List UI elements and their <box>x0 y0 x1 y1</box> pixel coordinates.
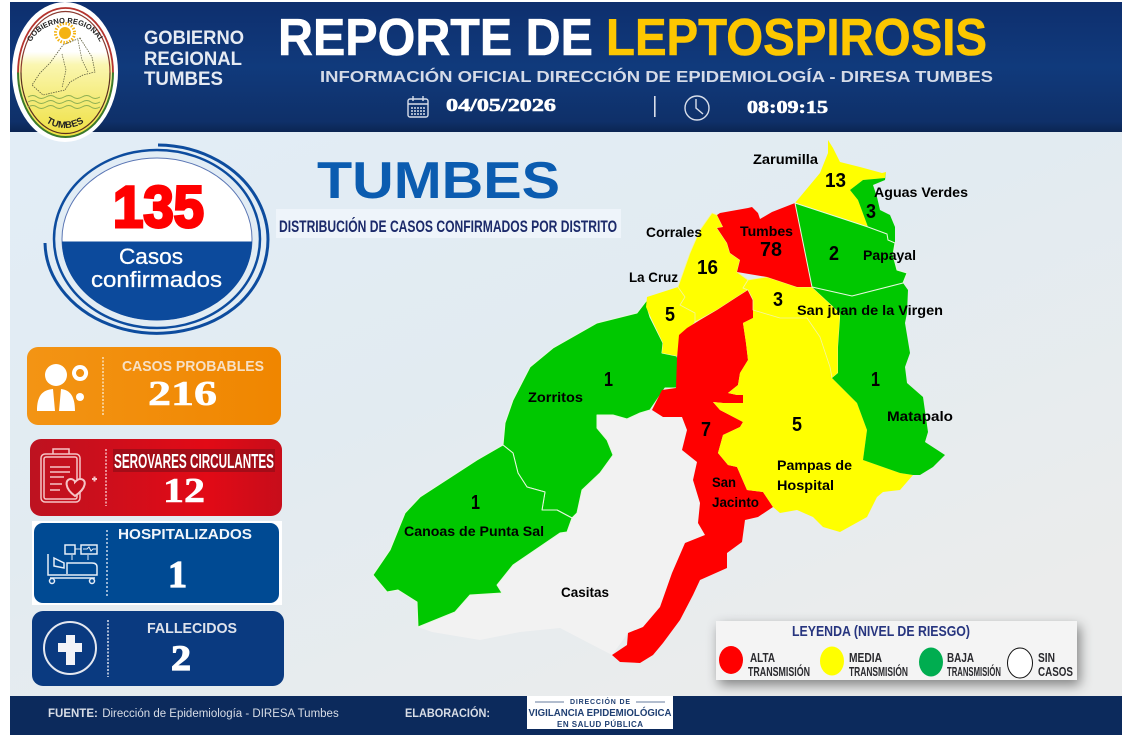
government name: REGIONAL <box>144 49 242 70</box>
district: Zarumilla <box>795 140 886 227</box>
district labels and counts: Canoas de Punta Sal <box>404 523 544 539</box>
icon: regional government emblem <box>12 2 118 142</box>
icon: cross <box>44 622 96 674</box>
time: 08:09:15 <box>747 97 828 117</box>
district labels and counts: Zorritos <box>528 389 583 405</box>
district: Tumbes <box>717 203 812 287</box>
district: Aguas Verdes <box>850 172 895 243</box>
district labels and counts: 13 <box>825 170 846 192</box>
card: hospitalizados: HOSPITALIZADOS <box>118 526 252 543</box>
legend item: sin casos: CASOS <box>1038 664 1073 679</box>
district labels and counts: La Cruz <box>629 269 678 285</box>
district labels and counts <box>404 151 968 600</box>
source: FUENTE: <box>48 708 98 720</box>
district: Canoas de Punta Sal <box>373 445 572 627</box>
legend item: media: MEDIA <box>849 650 882 665</box>
legend: LEYENDA (NIVEL DE RIESGO) <box>792 623 970 640</box>
legend item: baja: BAJA <box>947 650 974 665</box>
epidemiology office logo <box>527 696 673 729</box>
district labels and counts: Aguas Verdes <box>874 184 968 200</box>
report title <box>278 9 987 67</box>
map heading <box>276 152 621 238</box>
legend item: media: TRANSMISIÓN <box>849 664 908 679</box>
district labels and counts: Jacinto <box>712 494 759 510</box>
district labels and counts: Tumbes <box>740 223 793 239</box>
district labels and counts: Pampas de <box>777 457 852 473</box>
date: 04/05/2026 <box>446 95 556 115</box>
district labels and counts: Casitas <box>561 584 609 600</box>
confirmed cases label: Casos <box>119 244 183 269</box>
card: serovares circulantes <box>30 439 282 516</box>
legend <box>716 621 1077 680</box>
legend item: sin casos <box>1008 648 1073 679</box>
epidemiology office logo: EN SALUD PÚBLICA <box>557 720 643 729</box>
produced by: ELABORACIÓN: <box>405 707 490 720</box>
district labels and counts: 7 <box>701 419 711 441</box>
district map <box>373 140 968 663</box>
district labels and counts: 1 <box>471 492 480 514</box>
icon: regional government emblem: GOBIERNO REGIONAL <box>28 18 103 42</box>
footer bar <box>10 696 1122 735</box>
confirmed cases label <box>91 244 222 292</box>
total confirmed cases badge <box>45 145 268 333</box>
district labels and counts: 1 <box>871 369 880 391</box>
district: Casitas <box>418 410 705 655</box>
card: fallecidos: FALLECIDOS <box>147 620 237 637</box>
icon: clock <box>685 96 709 120</box>
district labels and counts: Hospital <box>777 477 834 493</box>
icon: regional government emblem: TUMBES <box>48 116 84 128</box>
legend item: baja: TRANSMISIÓN <box>947 664 1001 679</box>
district labels and counts: 78 <box>760 239 782 261</box>
icon: hospital bed <box>48 545 97 584</box>
report title: REPORTE DE <box>278 9 593 67</box>
card: serovares circulantes: 12 <box>163 471 205 510</box>
icon: clipboard with heart <box>41 449 97 502</box>
epidemiology office logo: VIGILANCIA EPIDEMIOLÓGICA <box>528 706 672 719</box>
legend item: alta: TRANSMISIÓN <box>748 664 810 679</box>
district: Pampas de Hospital <box>713 310 913 532</box>
district: San Juan de la Virgen <box>743 277 840 378</box>
card: serovares circulantes: SEROVARES CIRCULANTES <box>114 451 274 473</box>
district labels and counts: Matapalo <box>887 408 953 424</box>
district: Matapalo <box>812 283 945 475</box>
district labels and counts: Zarumilla <box>753 151 818 167</box>
district: Papayal <box>795 203 907 296</box>
card: casos probables: CASOS PROBABLES <box>122 358 264 375</box>
header banner <box>10 2 1122 132</box>
district labels and counts: 3 <box>866 201 876 223</box>
legend item: media <box>820 646 908 679</box>
district labels and counts: San juan de la Virgen <box>797 302 943 318</box>
confirmed cases label: confirmados <box>91 267 222 292</box>
district labels and counts: 3 <box>773 289 783 311</box>
district labels and counts: Corrales <box>646 224 702 240</box>
time divider <box>654 96 656 117</box>
card: hospitalizados <box>32 521 282 605</box>
card: hospitalizados: 1 <box>168 554 187 596</box>
legend item: alta: ALTA <box>750 650 775 665</box>
legend item: baja <box>919 648 1001 679</box>
government name <box>144 28 244 90</box>
district: San Jacinto <box>612 290 773 663</box>
card: fallecidos: 2 <box>171 638 191 678</box>
government name: TUMBES <box>144 69 223 90</box>
district labels and counts: 5 <box>792 414 802 436</box>
district labels and counts: Papayal <box>863 247 916 263</box>
legend item: alta <box>719 646 810 679</box>
epidemiology office logo: DIRECCIÓN DE <box>570 697 630 706</box>
icon: calendar <box>408 96 428 117</box>
district: Corrales <box>678 213 748 322</box>
district: Zorritos <box>503 300 678 518</box>
district labels and counts: 1 <box>604 369 613 391</box>
card: casos probables: 216 <box>148 374 217 413</box>
legend item: sin casos: SIN <box>1038 650 1055 665</box>
district: La Cruz <box>646 287 695 356</box>
source: Dirección de Epidemiología - DIRESA Tumbes <box>99 708 339 720</box>
government name: GOBIERNO <box>144 28 244 49</box>
district labels and counts: 5 <box>665 304 675 326</box>
district labels and counts: 16 <box>697 257 718 279</box>
icon: person with question <box>37 364 86 411</box>
report subtitle: INFORMACIÓN OFICIAL DIRECCIÓN DE EPIDEMIOLOGÍA - DIRESA TUMBES <box>320 67 993 86</box>
district labels and counts: San <box>712 474 736 490</box>
district labels and counts: 2 <box>829 243 839 265</box>
confirmed cases value: 135 <box>113 175 204 240</box>
report title: LEPTOSPIROSIS <box>606 9 987 67</box>
card: casos probables <box>27 347 281 425</box>
card: fallecidos <box>32 611 284 686</box>
map heading: TUMBES <box>317 152 560 210</box>
map heading: DISTRIBUCIÓN DE CASOS CONFIRMADOS POR DISTRITO <box>279 217 617 236</box>
